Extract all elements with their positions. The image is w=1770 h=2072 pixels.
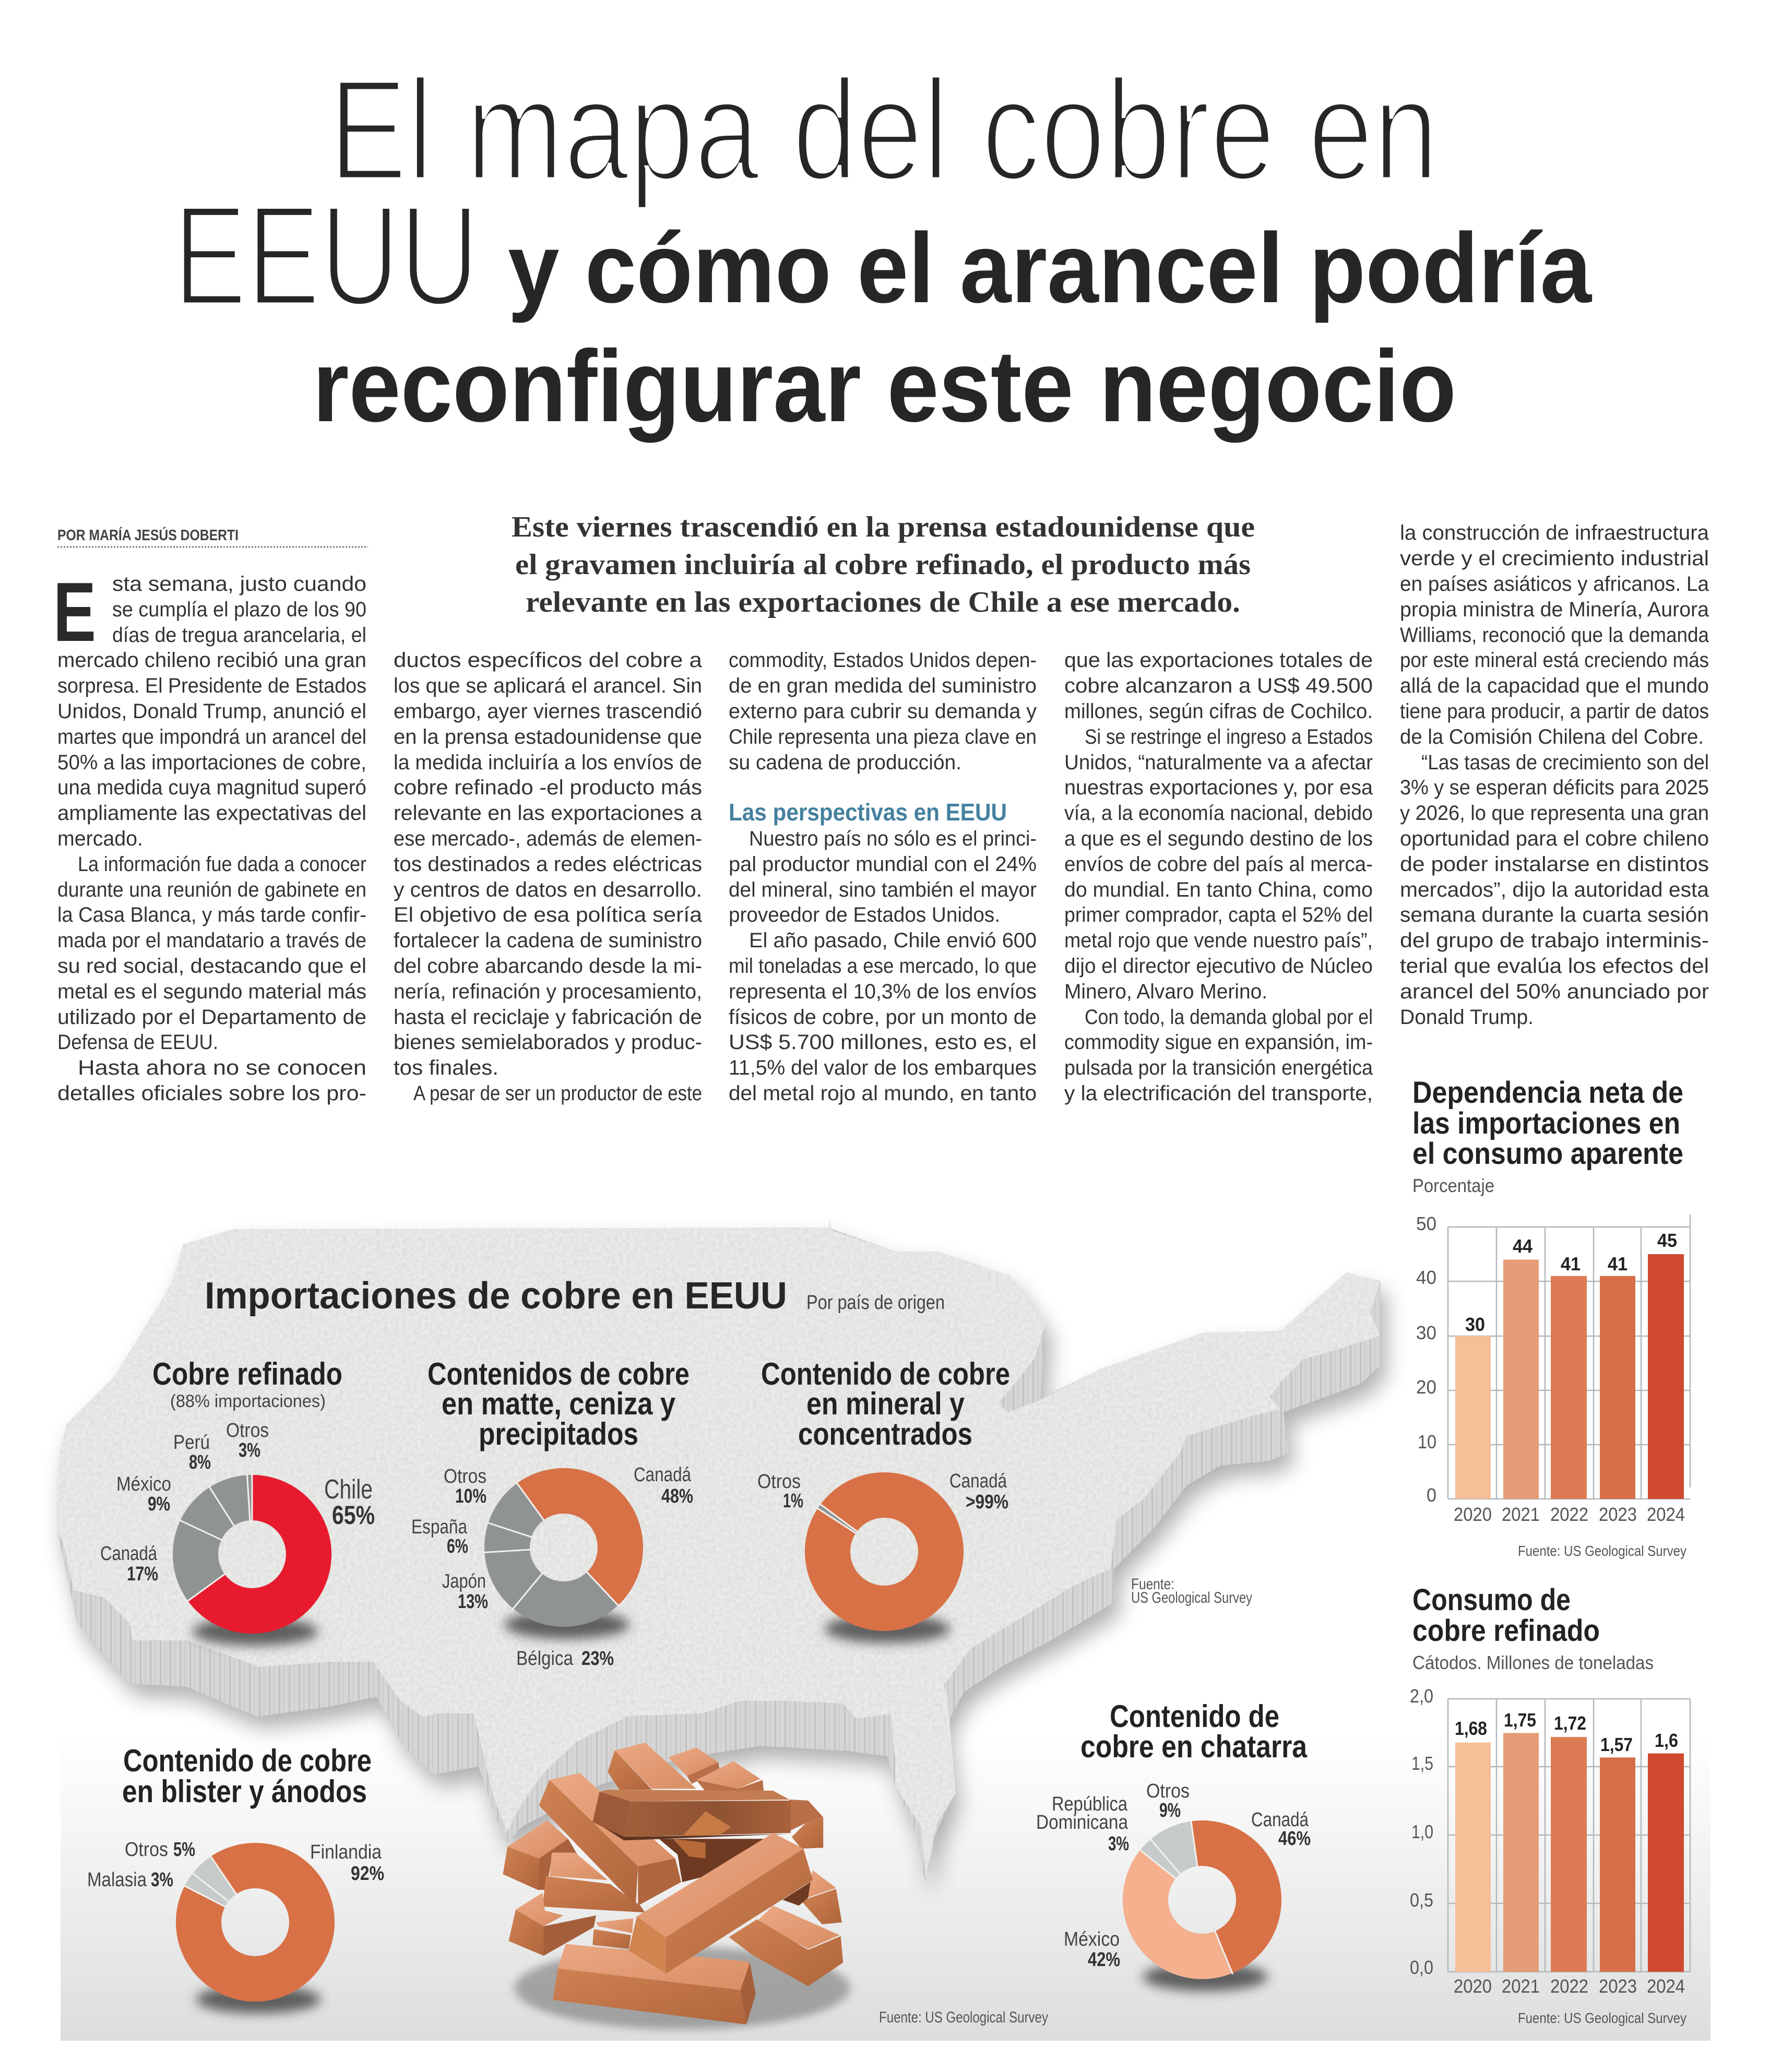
text column 4: cobre alcanzaron a US$ 49.500 [1064,674,1373,697]
text column 1: la Casa Blanca, y más tarde confir- [57,903,366,926]
map heading: Por país de origen [806,1292,945,1314]
bar chart: millones de toneladas: 1,5 [1411,1753,1433,1774]
chart heading: Consumo de [1412,1583,1571,1617]
panel: grey gradient background [61,1733,1710,2041]
donut chart: matte [483,1468,643,1639]
panel: blister y ánodos [87,1743,384,2014]
chart heading: Porcentaje [1412,1175,1494,1196]
panel: cobre refinado: (88% importaciones) [170,1391,326,1411]
text column 1: martes que impondrá un arancel del [57,725,366,748]
bar chart: porcentaje: 2024 [1647,1504,1685,1525]
chart heading [1412,1076,1683,1196]
text column 4: y la electrificación del transporte, [1064,1082,1373,1105]
source note: Fuente: US Geological Survey [1518,2010,1686,2026]
text column 5: mercados”, dijo la autoridad esta [1400,878,1709,901]
panel: cobre refinado: Canadá [100,1543,158,1565]
panel: chatarra: República [1052,1793,1128,1815]
bar chart: millones de toneladas: 1,72 [1554,1712,1586,1734]
text column 1: durante una reunión de gabinete en [57,878,366,901]
text column 1: mercado. [57,827,143,850]
panel: chatarra: 9% [1159,1800,1181,1821]
text column 4: que las exportaciones totales de [1064,649,1373,672]
text column 2: cobre refinado -el producto más [394,776,702,799]
text column 2: ese mercado-, además de elemen- [394,827,702,850]
text column 1: su red social, destacando que el [57,955,366,978]
text column 3: proveedor de Estados Unidos. [729,903,1000,926]
panel: matte, ceniza y precipitados: en matte, ceniza y [442,1386,676,1421]
text column 2: tos finales. [394,1056,498,1079]
text column 2: A pesar de ser un productor de este [413,1082,702,1105]
text column 4: vía, a la economía nacional, debido [1064,802,1373,825]
panel: blister y ánodos: Finlandia [310,1841,382,1863]
text column 5: “Las tasas de crecimiento son del [1421,751,1709,774]
panel: matte, ceniza y precipitados: 48% [661,1485,693,1507]
panel: chatarra: 42% [1088,1949,1120,1971]
text column 3: representa el 10,3% de los envíos [729,980,1037,1003]
section heading: Las perspectivas en EEUU [729,799,1007,826]
panel: cobre refinado: 3% [239,1439,260,1461]
text column 5: del grupo de trabajo interminis- [1400,929,1709,952]
chart heading: el consumo aparente [1412,1137,1683,1171]
panel: cobre refinado: Perú [173,1432,210,1454]
bar chart: millones de toneladas: 1,6 [1655,1730,1678,1751]
text column 3: El año pasado, Chile envió 600 [749,929,1037,952]
map of the United States [57,1219,1386,1897]
bar chart: porcentaje: 2020 [1454,1504,1492,1525]
text column 1: 50% a las importaciones de cobre, [57,751,366,774]
text column 2: hasta el reciclaje y fabricación de [394,1006,702,1029]
text column 4: Con todo, la demanda global por el [1085,1006,1373,1029]
text column 3: Chile representa una pieza clave en [729,725,1037,748]
text column 4: dijo el director ejecutivo de Núcleo [1064,955,1373,978]
subheading deck: el gravamen incluiría al cobre refinado, el producto más [515,549,1251,581]
text column 2: la medida incluiría a los envíos de [394,751,702,774]
panel: blister y ánodos: Otros [125,1839,168,1861]
panel: matte, ceniza y precipitados [411,1356,693,1670]
panel: chatarra: 3% [1108,1833,1129,1855]
text column 5 [1400,521,1709,1029]
panel: mineral y concentrados [757,1356,1010,1643]
text column 3: US$ 5.700 millones, esto es, el [729,1031,1037,1054]
text column 1: Hasta ahora no se conocen [78,1056,366,1079]
subheading deck: relevante en las exportaciones de Chile a ese mercado. [526,586,1240,618]
source note: map: Fuente: [1131,1576,1174,1593]
chart heading: cobre refinado [1412,1614,1600,1648]
bar chart: porcentaje: 20 [1416,1376,1436,1398]
panel: chatarra: México [1064,1928,1120,1950]
bar chart: porcentaje: 2022 [1550,1504,1588,1525]
text column 2: y centros de datos en desarrollo. [394,878,702,901]
map heading: Importaciones de cobre en EEUU [205,1275,787,1317]
text column 4: pulsada por la transición energética [1064,1056,1373,1079]
text column 1: La información fue dada a conocer [78,853,366,876]
panel: chatarra: cobre en chatarra [1080,1729,1308,1764]
donut chart: mineral [806,1473,963,1643]
panel: chatarra: Canadá [1251,1809,1309,1831]
bar chart: millones de toneladas: 1,0 [1411,1821,1433,1842]
text column 2: fortalecer la cadena de suministro [394,929,702,952]
text column 1: mercado chileno recibió una gran [57,649,366,672]
text column 3: externo para cubrir su demanda y [729,700,1037,723]
text column 5: semana durante la cuarta sesión [1400,903,1709,926]
text column 1: metal es el segundo material más [57,980,366,1003]
text column 5: arancel del 50% anunciado por [1400,980,1709,1003]
panel: mineral y concentrados: Canadá [949,1470,1007,1492]
text column 1: ampliamente las expectativas del [57,802,366,825]
panel: chatarra [1036,1699,1311,1991]
text column 1: una medida cuya magnitud superó [57,776,366,799]
text column 5: de poder instalarse en distintos [1400,853,1709,876]
text column 1 [57,573,366,1105]
panel: matte, ceniza y precipitados: Bélgica [516,1648,574,1670]
text column 3: del metal rojo al mundo, en tanto [729,1082,1037,1105]
byline: POR MARÍA JESÚS DOBERTI [57,526,239,544]
text column 3: mil toneladas a ese mercado, lo que [729,955,1037,978]
text column 4: envíos de cobre del país al merca- [1064,853,1373,876]
panel: matte, ceniza y precipitados: Canadá [634,1464,692,1486]
text column 5: y 2026, lo que representa una gran [1400,802,1709,825]
text column 4 [1064,649,1373,1105]
panel: cobre refinado [100,1356,375,1646]
panel: blister y ánodos: 3% [151,1869,173,1891]
panel: matte, ceniza y precipitados: Otros [444,1466,486,1487]
text column 3: físicos de cobre, por un monto de [729,1006,1037,1029]
text column 1: sorpresa. El Presidente de Estados [57,674,366,697]
drop cap E: E [53,565,96,659]
source note: map [1131,1576,1252,1606]
text column 4: do mundial. En tanto China, como [1064,878,1373,901]
bar chart: millones de toneladas: 1,68 [1455,1718,1487,1739]
panel: blister y ánodos: en blister y ánodos [122,1774,367,1809]
icon: stack of copper ingots [503,1743,850,2029]
bar chart: porcentaje [1416,1213,1690,1525]
panel: matte, ceniza y precipitados: 10% [455,1485,486,1507]
text column 3: Nuestro país no sólo es el princi- [749,827,1037,850]
subheading deck [512,511,1255,618]
bar chart: millones de toneladas: 0,0 [1410,1957,1433,1978]
text column 1: se cumplía el plazo de los 90 [112,598,366,621]
bar chart: porcentaje: 45 [1657,1230,1677,1251]
bar chart: porcentaje: 30 [1416,1322,1436,1343]
panel: chatarra: 46% [1278,1828,1311,1850]
donut chart: blister [176,1843,334,2014]
text column 3: su cadena de producción. [729,751,961,774]
text column 2: relevante en las exportaciones a [394,802,703,825]
panel: mineral y concentrados: en mineral y [806,1386,965,1421]
text column 5: Williams, reconoció que la demanda [1400,624,1709,647]
bar chart: millones de toneladas [1410,1685,1690,1997]
source note: map: US Geological Survey [1131,1589,1252,1606]
panel: mineral y concentrados: 1% [783,1490,803,1512]
text column 5: de la Comisión Chilena del Cobre. [1400,725,1704,748]
text column 4: Si se restringe el ingreso a Estados [1085,725,1373,748]
text column 2: embargo, ayer viernes trascendió [394,700,702,723]
text column 5: verde y el crecimiento industrial [1400,547,1709,570]
bar chart: millones de toneladas: 1,75 [1504,1709,1536,1731]
text column 1: Defensa de EEUU. [57,1031,218,1054]
panel: cobre refinado: Chile [324,1474,373,1505]
chart heading: las importaciones en [1412,1106,1680,1140]
title: y cómo el arancel podría [508,213,1592,324]
bar chart: porcentaje: 10 [1418,1431,1436,1452]
panel: cobre refinado: México [116,1473,171,1495]
bar chart: millones de toneladas: 2,0 [1410,1685,1433,1707]
bar chart: porcentaje: 50 [1416,1213,1436,1234]
text column 4: millones, según cifras de Cochilco. [1064,700,1373,723]
text column 5: 3% y se esperan déficits para 2025 [1400,776,1709,799]
panel: mineral y concentrados: Contenido de cobre [761,1356,1010,1391]
panel: matte, ceniza y precipitados: 6% [447,1535,468,1557]
panel: cobre refinado: 9% [148,1493,170,1515]
panel: cobre refinado: Otros [226,1420,269,1442]
bar chart: millones de toneladas: 2020 [1454,1975,1492,1997]
text column 5: Donald Trump. [1400,1006,1534,1029]
text column 5: terial que evalúa los efectos del [1400,955,1709,978]
text column 4: nuestras exportaciones y, por esa [1064,776,1373,799]
text column 5: oportunidad para el cobre chileno [1400,827,1709,850]
text column 3: pal productor mundial con el 24% [729,853,1037,876]
text column 3: de en gran medida del suministro [729,674,1037,697]
text column 2: nería, refinación y procesamiento, [394,980,702,1003]
text column 1: días de tregua arancelaria, el [112,624,366,647]
panel: blister y ánodos: Contenido de cobre [123,1743,372,1778]
text column 5: tiene para producir, a partir de datos [1400,700,1709,723]
text column 2 [394,649,703,1105]
bar chart: millones de toneladas: 2023 [1599,1975,1637,1997]
panel: mineral y concentrados: >99% [966,1491,1008,1513]
text column 1: mada por el mandatario a través de [57,929,366,952]
text column 3: del mineral, sino también el mayor [729,878,1037,901]
source note: Fuente: US Geological Survey [1518,1543,1686,1559]
panel: mineral y concentrados: Otros [757,1471,801,1493]
panel: chatarra: Otros [1146,1780,1190,1802]
panel: dependencia neta de las importaciones [1412,1076,1690,1559]
panel: blister y ánodos: 92% [351,1863,384,1885]
subheading deck: Este viernes trascendió en la prensa estadounidense que [512,511,1255,543]
donut chart: cobre refinado [180,1474,318,1646]
text column 3: commodity, Estados Unidos depen- [729,649,1037,672]
bar chart: millones de toneladas: 2021 [1502,1975,1540,1997]
panel: matte, ceniza y precipitados: precipitados [479,1416,638,1451]
text column 4: Minero, Alvaro Merino. [1064,980,1267,1003]
bar chart: millones de toneladas: 0,5 [1410,1889,1433,1911]
text column 1: detalles oficiales sobre los pro- [57,1082,366,1105]
bar chart: millones de toneladas: 2024 [1647,1975,1685,1997]
text column 4: primer comprador, capta el 52% del [1064,903,1373,926]
panel: blister y ánodos: 5% [173,1839,195,1861]
title: EEUU [173,176,479,336]
panel: cobre refinado: 65% [332,1501,375,1530]
chart heading: Dependencia neta de [1412,1076,1683,1110]
text column 2: los que se aplicará el arancel. Sin [394,674,702,697]
bar chart: porcentaje: 30 [1465,1314,1485,1335]
text column 2: El objetivo de esa política sería [394,903,703,926]
text column 2: ductos específicos del cobre a [394,649,703,672]
panel: cobre refinado: Cobre refinado [152,1356,342,1391]
text column 2: bienes semielaborados y produc- [394,1031,702,1054]
title: El mapa del cobre en [329,50,1439,211]
text column 2: tos destinados a redes eléctricas [394,853,702,876]
panel: matte, ceniza y precipitados: 23% [581,1648,614,1670]
text column 4: metal rojo que vende nuestro país”, [1064,929,1373,952]
text column 5: en países asiáticos y africanos. La [1400,573,1709,596]
title [173,50,1592,443]
text column 5: allá de la capacidad que el mundo [1400,674,1709,697]
panel: cobre refinado: 8% [189,1451,211,1473]
bar chart: millones de toneladas: 2022 [1550,1975,1588,1997]
bar chart: porcentaje: 0 [1427,1484,1436,1506]
bar chart: porcentaje: 41 [1561,1253,1581,1275]
text column 4: a que es el segundo destino de los [1064,827,1373,850]
bar chart: porcentaje: 2021 [1502,1504,1540,1525]
text column 2: del cobre abarcando desde la mi- [394,955,702,978]
text column 1: utilizado por el Departamento de [57,1006,366,1029]
panel: matte, ceniza y precipitados: Japón [442,1570,486,1592]
text column 4: Unidos, “naturalmente va a afectar [1064,751,1373,774]
text column 5: propia ministra de Minería, Aurora [1400,598,1709,621]
panel: matte, ceniza y precipitados: 13% [458,1591,488,1613]
panel: chatarra: Contenido de [1110,1699,1279,1734]
text column 5: por este mineral está creciendo más [1400,649,1709,672]
text column 1: Unidos, Donald Trump, anunció el [57,700,366,723]
panel: matte, ceniza y precipitados: Contenidos de cobre [427,1356,690,1391]
bar chart: millones de toneladas: 1,57 [1600,1734,1633,1755]
panel: mineral y concentrados: concentrados [798,1416,972,1451]
panel: matte, ceniza y precipitados: España [411,1516,468,1538]
panel: chatarra: Dominicana [1036,1812,1128,1833]
bar chart: porcentaje: 41 [1608,1253,1628,1275]
source note: bottom: Fuente: US Geological Survey [879,2009,1048,2026]
bar chart: porcentaje: 2023 [1599,1504,1637,1525]
text column 3: 11,5% del valor de los embarques [729,1056,1037,1079]
text column 4: commodity sigue en expansión, im- [1064,1031,1373,1054]
panel: cobre refinado: 17% [127,1563,158,1585]
title: reconfigurar este negocio [313,329,1456,443]
donut chart: chatarra [1138,1820,1268,1991]
chart heading: Cátodos. Millones de toneladas [1412,1652,1654,1673]
text column 2: en la prensa estadounidense que [394,725,702,748]
bar chart: porcentaje: 40 [1416,1267,1436,1288]
text column 5: la construcción de infraestructura [1400,521,1709,544]
panel: consumo de cobre refinado [1410,1583,1690,2026]
chart heading [1412,1583,1654,1673]
text column 3 [729,649,1037,1105]
text column 1: sta semana, justo cuando [112,573,366,596]
panel: blister y ánodos: Malasia [87,1869,147,1891]
bar chart: porcentaje: 44 [1513,1235,1533,1257]
